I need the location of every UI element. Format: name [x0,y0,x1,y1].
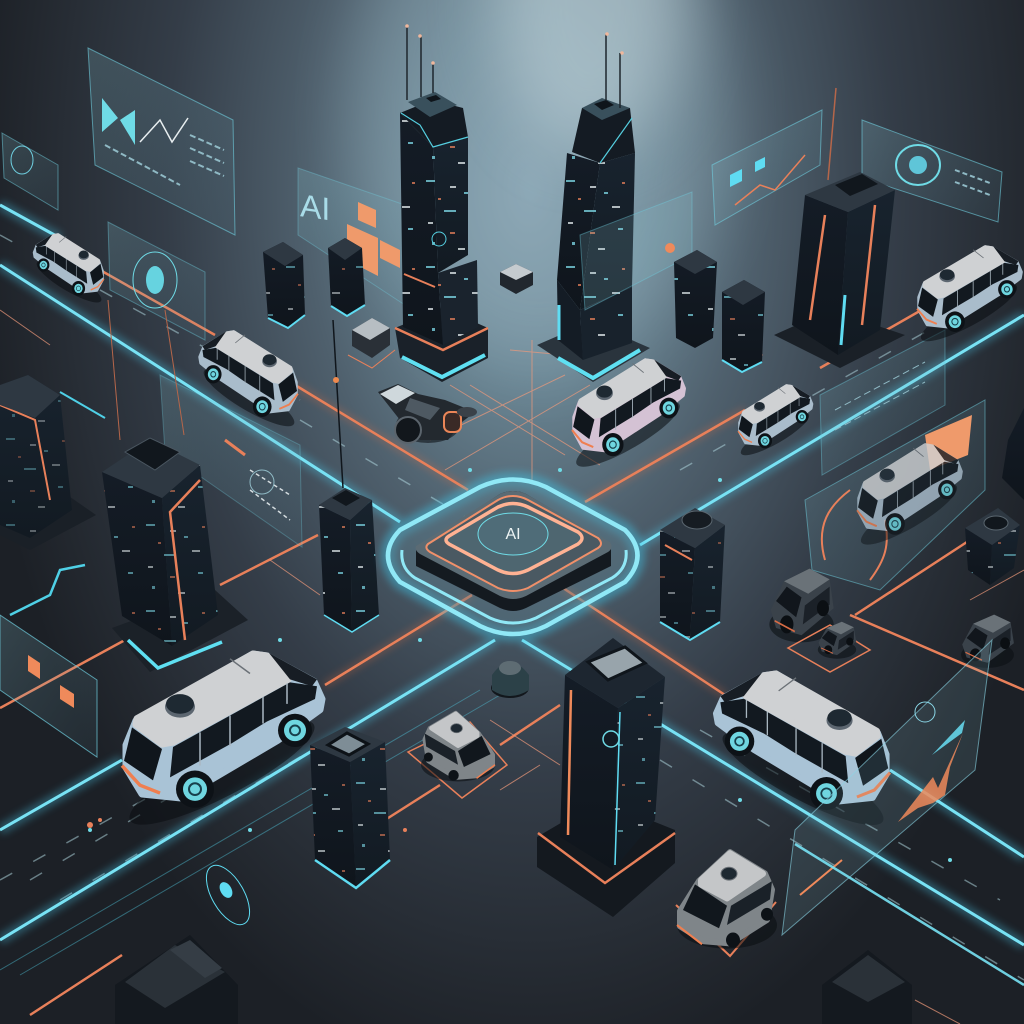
tower: tall central right [537,32,650,382]
small delivery robot left [348,318,395,368]
tower: centre right slim [660,508,725,640]
tower: small back centre left [328,238,365,316]
panel: analytics chart top left [88,48,235,235]
panel: AI hologram [298,168,405,305]
chip top [416,491,612,599]
vehicle: shuttle left [198,332,300,435]
vehicle: dark car small [818,622,856,659]
tower: small back right 1 [674,250,717,348]
small delivery robot rear [500,264,533,294]
central AI chip platform [388,480,638,634]
orange ring outer [426,496,601,591]
glow ring [388,480,638,634]
panel: van hologram right [805,400,985,590]
chip base [416,491,611,611]
inner cyan ring [478,513,548,555]
vehicle: dark car right [769,569,834,642]
tower: lower main with plinth [537,638,675,917]
tower: far right small [965,508,1020,585]
orange ring inner [446,504,582,574]
panel: hologram tower overlay [580,192,692,310]
chip label: AI [505,526,521,543]
orange pad under small car [788,625,870,672]
orange pad under bottom car [676,902,776,956]
tower: lower centre [310,727,390,888]
tower: right edge [1002,408,1024,500]
vehicle: hologram shuttle right [855,445,963,554]
panel: radar hologram [108,222,205,340]
floor particles [58,468,952,862]
panel: AI hologram: AI [300,187,330,227]
tower top: bottom left [115,935,238,1024]
panel: large hologram lower right [782,640,1024,985]
floor chart trace left [10,565,85,615]
panel: map hologram centre left [160,375,302,547]
outer ring [388,480,638,634]
vehicle: large shuttle left [119,653,325,841]
panel: lower left hologram [0,615,97,757]
tower: tall central left [395,24,488,382]
tower: small back left [263,242,305,328]
tower: centre left slim [319,320,379,632]
cyan road light lines [0,205,1024,945]
vehicle: large shuttle right [713,673,893,840]
vehicle: dark car far right [961,615,1014,668]
vehicle: small car centre bottom [421,713,495,781]
drone [378,384,477,443]
tower: small back right 2 [722,280,765,372]
vehicle: shuttle centre [570,360,686,477]
panel: line chart top right [712,110,822,225]
panel: small gauge top left [2,133,58,210]
tower top: bottom right [822,950,912,1024]
road network [0,205,1024,1024]
vehicle: shuttle far right [915,247,1023,350]
panel: data hologram right [820,330,945,475]
small robot centre [491,661,529,698]
vehicle: small car bottom [677,852,777,949]
tower: far left [0,375,105,550]
radar ring on floor [198,858,258,932]
orange road light lines [295,385,745,695]
tower: left with plinth [102,300,248,672]
inner lower ring [402,550,626,623]
orange pad under small car [408,722,507,798]
tower: large right [774,88,905,368]
vehicle: shuttle upper left [33,234,105,309]
panel: gauge top right [862,120,1002,222]
vehicle: shuttle centre right [737,385,813,462]
